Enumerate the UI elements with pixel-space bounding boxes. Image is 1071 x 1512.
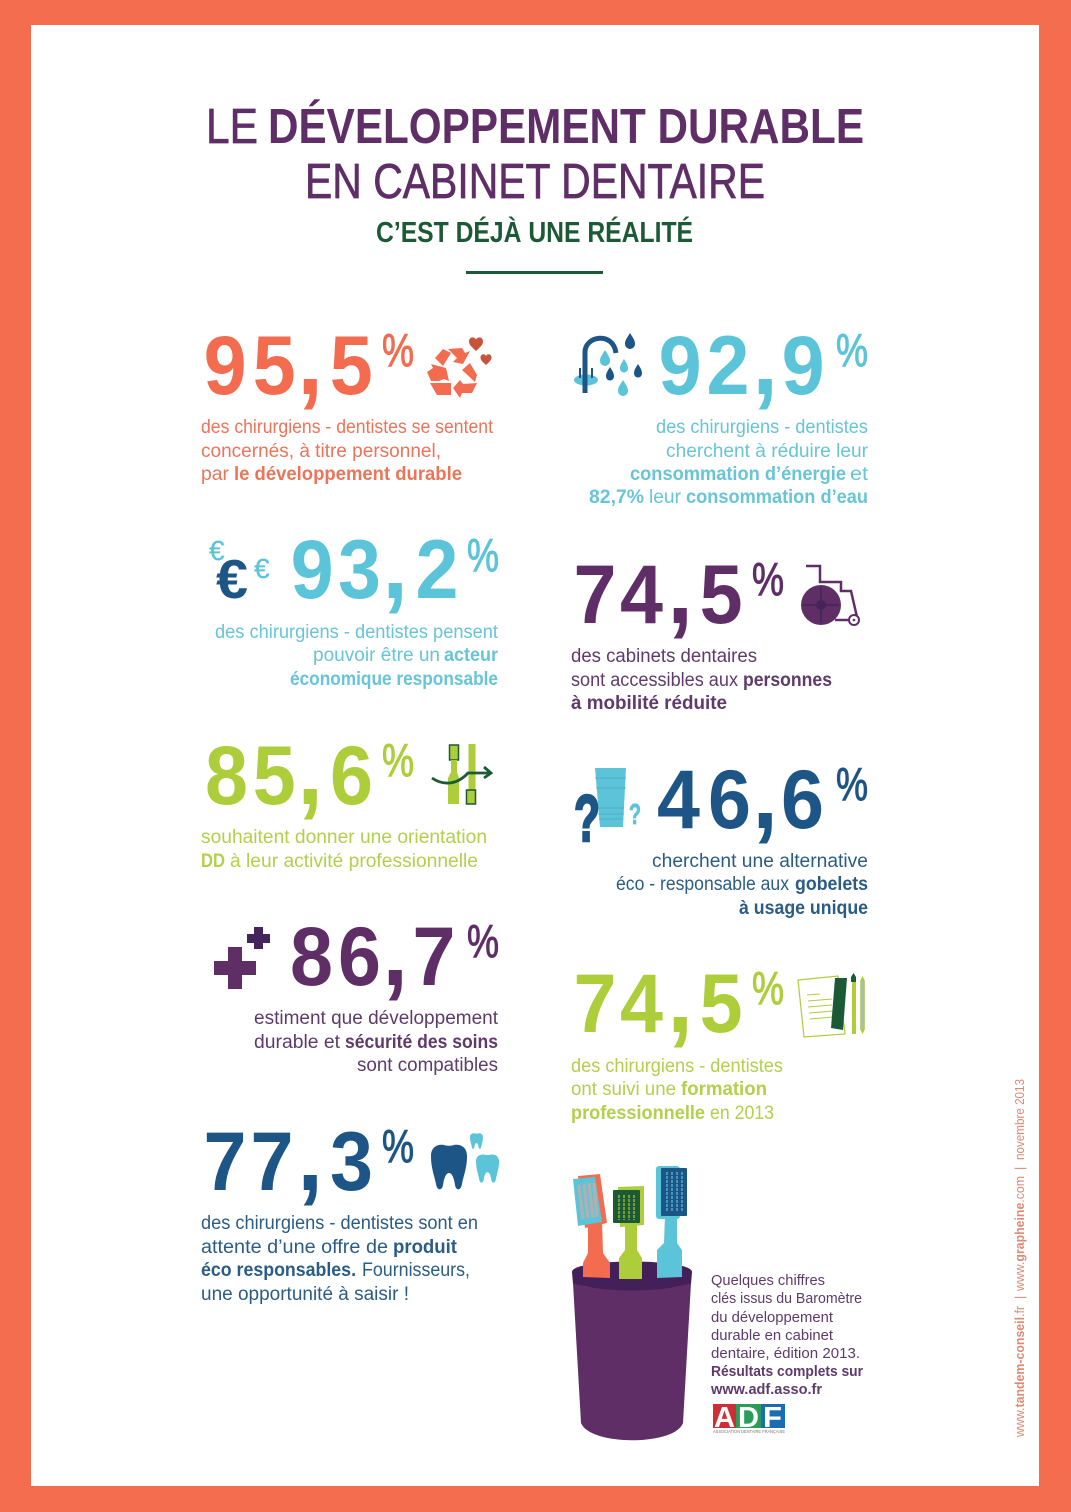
icon: faucet and drops <box>574 333 642 396</box>
description: et <box>850 464 869 485</box>
description: acteur <box>444 645 499 666</box>
description <box>215 622 499 690</box>
description: cherchent à réduire leur <box>666 441 869 462</box>
icon: euro signs: € <box>209 535 225 566</box>
panel: 74,5 % training <box>571 942 865 1124</box>
description: gobelets <box>795 874 868 895</box>
description: par <box>201 464 230 485</box>
description: durable et <box>254 1032 341 1053</box>
panel: 93,2 % economic actor <box>209 508 499 690</box>
credits: vertical text: www.grapheine.com <box>1013 1176 1027 1292</box>
percent sign: % <box>382 734 414 786</box>
icon: coral toothbrush <box>573 1174 610 1278</box>
subtitle: C’EST DÉJÀ UNE RÉALITÉ <box>376 217 693 249</box>
number: 74,5 <box>574 942 743 1054</box>
logo: ADF: A <box>714 1402 735 1434</box>
icon: cups and question marks <box>574 768 641 855</box>
description: à mobilité réduite <box>571 693 727 714</box>
icon: cyan toothbrush <box>656 1166 687 1278</box>
source note: durable en cabinet <box>711 1328 833 1344</box>
panel: 46,6 % single-use cups <box>574 738 868 919</box>
source note: clés issus du Baromètre <box>711 1291 862 1307</box>
number: 95,5 <box>204 304 373 416</box>
description: des chirurgiens - dentistes pensent <box>215 622 499 643</box>
description <box>201 417 494 485</box>
percent sign: % <box>836 324 868 376</box>
description: consommation d’énergie <box>630 464 846 485</box>
icon: lime toothbrush <box>613 1186 644 1279</box>
source note <box>710 1273 863 1398</box>
description: leur <box>649 487 682 508</box>
credits: vertical text: | <box>1013 1296 1027 1299</box>
logo: ADF: F <box>763 1402 782 1434</box>
description: une opportunité à saisir ! <box>201 1284 409 1305</box>
percent sign: % <box>467 529 499 581</box>
description <box>254 1008 499 1076</box>
source note: du développement <box>711 1310 833 1326</box>
percent sign: % <box>382 1120 414 1172</box>
logo: ADF <box>713 1402 785 1434</box>
description: sécurité des soins <box>345 1032 498 1053</box>
source note: Résultats complets sur <box>711 1364 863 1380</box>
panel: 95,5 % concerned <box>201 304 494 485</box>
icon: cups and question marks: ? <box>629 799 641 831</box>
description: à leur activité professionnelle <box>230 851 478 872</box>
number: 46,6 <box>657 738 824 850</box>
credits: vertical text: novembre 2013 <box>1013 1079 1027 1160</box>
logo: ADF: ASSOCIATION DENTAIRE FRANÇAISE <box>713 1429 785 1434</box>
description: produit <box>393 1237 458 1258</box>
description: éco responsables. <box>201 1260 356 1281</box>
description <box>571 1056 783 1124</box>
description: cherchent une alternative <box>652 851 868 872</box>
description: en 2013 <box>710 1103 774 1124</box>
description: consommation d’eau <box>686 487 868 508</box>
source note: dentaire, édition 2013. <box>711 1346 860 1362</box>
description: pouvoir être un <box>313 645 440 666</box>
description: des chirurgiens - dentistes <box>571 1056 783 1077</box>
description <box>589 417 869 508</box>
description: des cabinets dentaires <box>571 646 757 667</box>
icon: euro signs <box>209 535 270 610</box>
description: ont suivi une <box>571 1079 676 1100</box>
description <box>201 827 487 872</box>
description: sont accessibles aux <box>571 670 738 691</box>
icon: euro signs: € <box>216 548 248 610</box>
description: des chirurgiens - dentistes se sentent <box>201 417 494 438</box>
cup body <box>573 1283 691 1440</box>
logo: ADF: D <box>738 1402 759 1434</box>
number: 77,3 <box>204 1100 373 1212</box>
description: professionnelle <box>571 1103 705 1124</box>
description: sont compatibles <box>357 1055 498 1076</box>
panel: 85,6 % DD orientation <box>201 714 491 872</box>
description <box>201 1213 478 1305</box>
icon: medical crosses <box>214 927 270 989</box>
description: le développement durable <box>234 464 462 485</box>
number: 86,7 <box>290 895 455 1007</box>
number: 85,6 <box>205 714 373 826</box>
description: attente d’une offre de <box>201 1237 388 1258</box>
description: personnes <box>743 670 832 691</box>
title line 1: DÉVELOPPEMENT DURABLE <box>268 100 864 154</box>
number: 93,2 <box>291 508 458 620</box>
description <box>616 851 868 919</box>
percent sign: % <box>467 915 499 967</box>
panel: 74,5 % accessibility <box>571 533 859 714</box>
icon: wheelchair <box>801 566 859 625</box>
title line 2: EN CABINET DENTAIRE <box>305 155 765 209</box>
percent sign: % <box>752 962 784 1014</box>
credits: vertical text: | <box>1013 1167 1027 1170</box>
number: 92,9 <box>659 304 825 416</box>
source note: www.adf.asso.fr <box>710 1382 822 1398</box>
description: 82,7% <box>589 487 644 508</box>
percent sign: % <box>752 553 784 605</box>
description: DD <box>201 851 225 872</box>
number: 74,5 <box>574 533 743 645</box>
credits: vertical text: www.tandem-conseil.fr <box>1013 1306 1027 1438</box>
panel: 86,7 % care safety <box>214 895 499 1076</box>
description: économique responsable <box>290 669 498 690</box>
description: estiment que développement <box>254 1008 499 1029</box>
description: des chirurgiens - dentistes <box>656 417 868 438</box>
description: Fournisseurs, <box>362 1260 470 1281</box>
credits: vertical text <box>1013 1079 1027 1438</box>
description: des chirurgiens - dentistes sont en <box>201 1213 478 1234</box>
icon: recycling symbol and hearts <box>427 337 492 398</box>
illustration: toothbrush cup <box>572 1166 692 1440</box>
description: concernés, à titre personnel, <box>201 441 441 462</box>
percent sign: % <box>836 758 868 810</box>
icon: document, ruler, pen, pencil <box>798 973 865 1037</box>
description: éco - responsable aux <box>616 874 789 895</box>
description: à usage unique <box>739 898 868 919</box>
description <box>571 646 832 714</box>
description: formation <box>681 1079 767 1100</box>
title line 1: LE <box>206 100 258 154</box>
icon: teeth <box>431 1133 499 1189</box>
percent sign: % <box>382 324 414 376</box>
icon: euro signs: € <box>254 553 270 584</box>
icon: toothbrushes and arrow <box>432 744 491 804</box>
icon: cups and question marks: ? <box>574 781 600 855</box>
panel: 92,9 % energy and water <box>574 304 869 508</box>
description: souhaitent donner une orientation <box>201 827 487 848</box>
source note: Quelques chiffres <box>711 1273 825 1289</box>
title block <box>206 100 864 274</box>
panel: 77,3 % eco products <box>201 1100 499 1305</box>
